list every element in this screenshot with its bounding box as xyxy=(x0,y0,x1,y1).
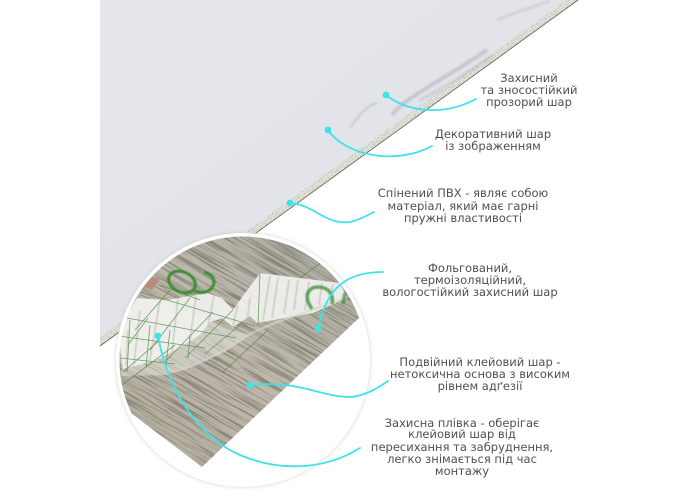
green logo marks xyxy=(165,267,345,309)
label: protective film: пересихання та забруднення, xyxy=(371,440,553,454)
label: foil layer: термоізоляційний, xyxy=(414,273,526,287)
label: protective layer xyxy=(480,71,578,109)
label: protective layer: прозорий шар xyxy=(486,95,572,109)
label: protective film: клейовий шар від xyxy=(408,427,516,441)
label: decorative layer: із зображенням xyxy=(445,139,541,153)
foam PVC edge strip xyxy=(100,0,578,346)
label: protective film: легко знімається під час xyxy=(387,452,537,466)
connector: protective layer xyxy=(386,95,476,110)
label: foil layer: Фольгований, xyxy=(428,261,512,275)
label: foil layer: вологостійкий захисний шар xyxy=(382,285,558,299)
wood texture layer xyxy=(120,236,359,467)
label: protective film: Захисна плівка - оберігає xyxy=(385,416,539,430)
connector: foamed PVC xyxy=(290,203,374,222)
connector: protective film xyxy=(158,336,360,466)
label: adhesive layer: Подвійний клейовий шар - xyxy=(399,355,561,369)
label: foamed PVC: матеріал, який має гарні xyxy=(388,199,538,213)
label: foil layer xyxy=(382,261,558,299)
label: adhesive layer: нетоксична основа з високим xyxy=(390,367,570,381)
label: protective layer: та зносостійкий xyxy=(480,83,578,97)
panel: decorative sheet xyxy=(100,0,578,346)
finger tip xyxy=(144,277,160,290)
marble veins xyxy=(350,1,550,128)
label: decorative layer xyxy=(435,127,551,153)
green mesh xyxy=(119,262,322,385)
label: adhesive layer xyxy=(390,355,570,393)
label: decorative layer: Декоративний шар xyxy=(435,127,551,141)
pale seam where the film lifts xyxy=(172,298,345,372)
translucent film over the left side xyxy=(118,298,250,376)
connector dots xyxy=(155,92,389,388)
label: protective film: монтажу xyxy=(435,464,489,478)
label: protective film xyxy=(371,416,553,478)
infographic xyxy=(100,0,578,489)
label: adhesive layer: рівнем адґезії xyxy=(438,379,523,393)
label: foamed PVC xyxy=(378,186,549,225)
label: protective layer: Захисний xyxy=(500,71,558,85)
connector: adhesive layer xyxy=(250,381,388,397)
label: foamed PVC: Спінений ПВХ - являє собою xyxy=(378,186,549,200)
connector: foil layer xyxy=(318,272,383,329)
callout circle: close-up of backing layers xyxy=(114,232,372,489)
label: foamed PVC: пружні властивості xyxy=(404,211,522,225)
connector lines xyxy=(158,95,476,466)
peeled foil layer xyxy=(118,273,347,369)
connector: decorative layer xyxy=(328,130,432,156)
